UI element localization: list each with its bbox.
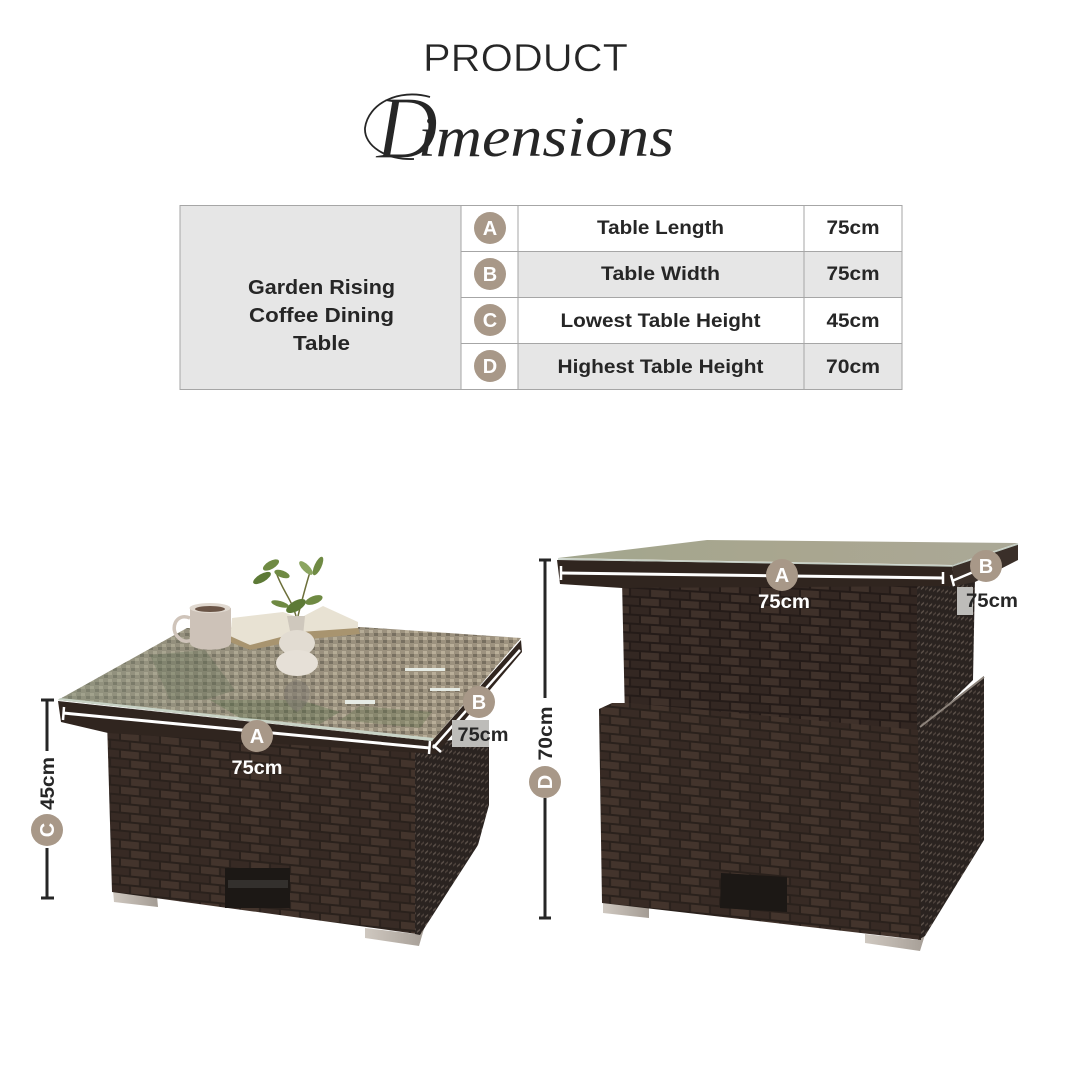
coffee mug bbox=[174, 603, 231, 650]
row A: Table Length bbox=[597, 218, 724, 239]
product name cell: Garden Rising bbox=[248, 276, 395, 299]
row D bbox=[461, 344, 902, 390]
row D: Highest Table Height bbox=[558, 357, 764, 378]
measure A on raised table: 75cm bbox=[758, 592, 810, 613]
upper wicker front bbox=[622, 580, 920, 735]
product name cell: Table bbox=[293, 332, 350, 355]
product name cell: Coffee Dining bbox=[249, 304, 394, 327]
row C: 45cm bbox=[826, 311, 880, 332]
measure B on low table bbox=[433, 650, 520, 752]
row A: A bbox=[483, 218, 497, 240]
measure A on low table: A bbox=[250, 726, 264, 748]
measure D bbox=[529, 560, 561, 918]
vase bbox=[276, 616, 318, 712]
title line: dimensions script: D bbox=[374, 79, 438, 178]
measure B on raised table bbox=[951, 550, 1018, 615]
lower wicker front bbox=[599, 703, 921, 940]
glass top bbox=[558, 540, 1018, 565]
title line: product: PRODUCT bbox=[423, 37, 628, 80]
measure A on raised table: A bbox=[775, 565, 789, 587]
title line: dimensions script bbox=[365, 79, 674, 178]
row C: Lowest Table Height bbox=[560, 311, 761, 332]
row A bbox=[461, 206, 902, 252]
measure B on low table: 75cm bbox=[458, 725, 508, 746]
row B: Table Width bbox=[601, 264, 720, 285]
dimensions table bbox=[180, 206, 902, 390]
measure B on raised table: B bbox=[979, 556, 993, 578]
row D: D bbox=[483, 356, 497, 378]
glass top bbox=[58, 627, 521, 741]
table rim bbox=[58, 701, 436, 754]
title bbox=[365, 37, 674, 178]
open book bbox=[230, 606, 360, 650]
row A: 75cm bbox=[826, 218, 880, 239]
handle slot bbox=[225, 868, 290, 908]
row C: C bbox=[483, 310, 497, 332]
side rim bbox=[952, 544, 1018, 586]
vent slot bbox=[720, 873, 787, 912]
measure C bbox=[31, 700, 63, 898]
measure A on low table: 75cm bbox=[232, 758, 282, 779]
front rim bbox=[557, 560, 956, 588]
measure A on low table bbox=[63, 707, 430, 779]
row D: 70cm bbox=[826, 357, 880, 378]
measure B on raised table: 75cm bbox=[966, 591, 1018, 612]
measure B on low table: B bbox=[472, 692, 486, 714]
wicker front face bbox=[107, 720, 418, 934]
illustration: low table with tableware bbox=[58, 555, 522, 946]
lower rim highlight bbox=[920, 677, 984, 727]
measure D: 70cm bbox=[536, 706, 557, 760]
table feet bbox=[113, 890, 428, 946]
wicker side face bbox=[415, 735, 489, 935]
plant bbox=[251, 555, 325, 616]
side rim bbox=[432, 640, 522, 754]
measure A on raised table bbox=[561, 559, 943, 613]
row B bbox=[461, 252, 902, 298]
glass edge bbox=[558, 544, 1018, 566]
measure D: D bbox=[535, 775, 557, 789]
table feet bbox=[603, 903, 928, 951]
row B: B bbox=[483, 264, 497, 286]
measure C: 45cm bbox=[38, 757, 59, 810]
upper wicker side bbox=[917, 578, 975, 735]
lower wicker side bbox=[916, 676, 984, 940]
measure C: C bbox=[37, 823, 59, 837]
row C bbox=[461, 298, 902, 344]
product name cell bbox=[180, 206, 461, 390]
illustration: raised table bbox=[557, 540, 1018, 951]
title line: dimensions script: imensions bbox=[418, 106, 674, 169]
row B: 75cm bbox=[826, 264, 880, 285]
